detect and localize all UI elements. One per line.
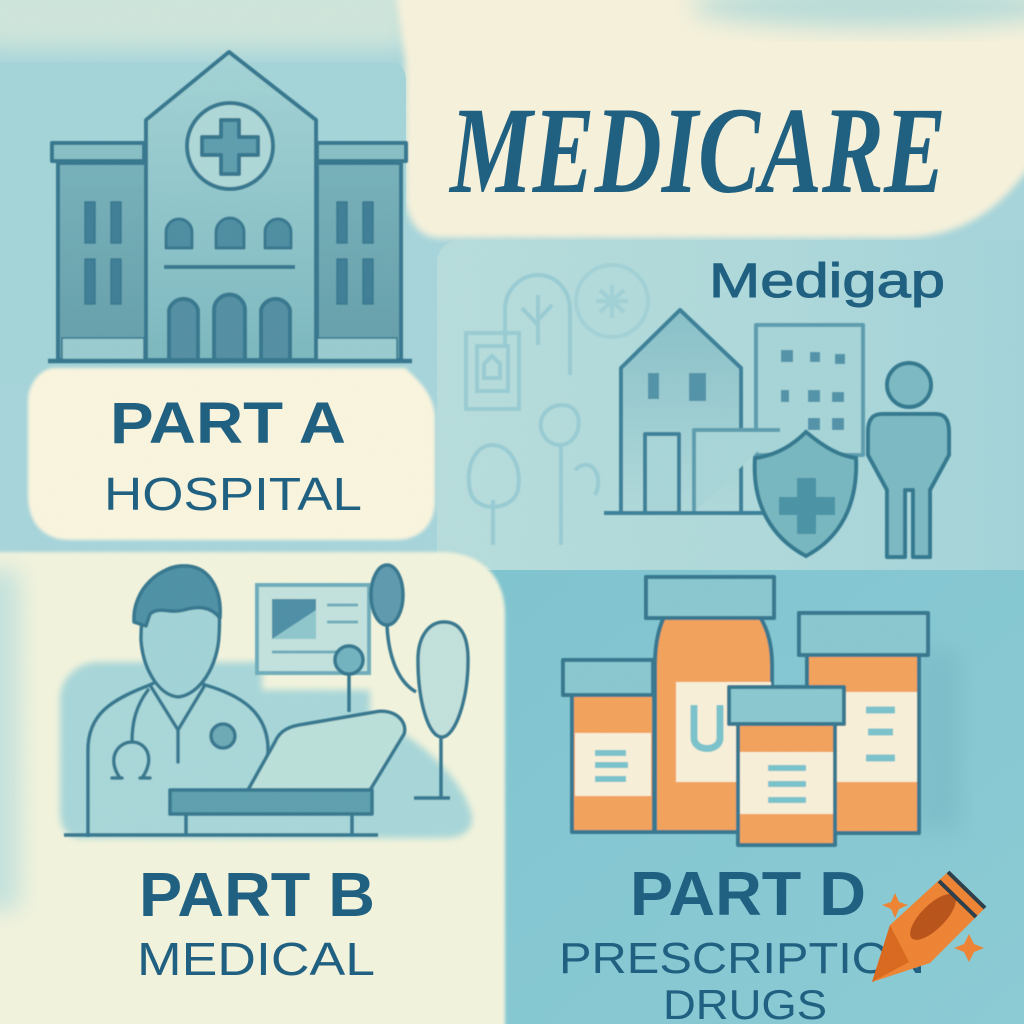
heading: Part A: PART A: [110, 391, 346, 456]
heading: Part B: PART B: [139, 861, 375, 930]
icon: pill bottles: [563, 577, 928, 845]
panel: Part B: [0, 552, 505, 1024]
icon: sparkles: [882, 893, 984, 962]
panel: Part A teal backdrop: [0, 62, 406, 385]
hospital doors: [169, 294, 290, 360]
text: Medical: MEDICAL: [137, 933, 375, 985]
panel: Part B scene backdrop: [60, 662, 472, 838]
text: Prescription: PRESCRIPTION: [559, 934, 925, 983]
text: Hospital: HOSPITAL: [104, 468, 362, 520]
icon: hospital: [48, 52, 412, 361]
heading: Medigap: Medigap: [709, 255, 945, 308]
bottle: front: [729, 687, 844, 845]
bottle: centre: [646, 577, 774, 832]
panel: Medigap: [437, 240, 1024, 572]
decorative bottle shadow: [915, 650, 960, 830]
hospital right wing: [317, 143, 406, 360]
decorative top haze: [690, 0, 1024, 28]
illustration: Medigap house and building: [604, 310, 863, 513]
bottle: left: [563, 660, 654, 832]
decorative left haze: [0, 570, 20, 910]
icon: person: [868, 363, 949, 557]
panel: Part D: [480, 570, 1024, 1024]
icon: crayon: [872, 872, 985, 982]
panel: Part A label: [28, 368, 435, 540]
hospital central block: [146, 52, 316, 360]
heading: Part D: PART D: [630, 860, 866, 929]
hospital medallion: [187, 103, 273, 189]
hospital arched windows: [166, 218, 291, 248]
illustration: doctor: [88, 566, 268, 835]
panel: title cream area: [395, 0, 1024, 238]
hospital left wing: [52, 143, 146, 360]
illustration: Medigap faded trees: [466, 265, 648, 545]
illustration: exam bed and equipment: [64, 565, 468, 835]
icon: shield: [755, 432, 856, 556]
illustration: monitor: [257, 585, 369, 673]
bottle: right: [799, 613, 928, 833]
